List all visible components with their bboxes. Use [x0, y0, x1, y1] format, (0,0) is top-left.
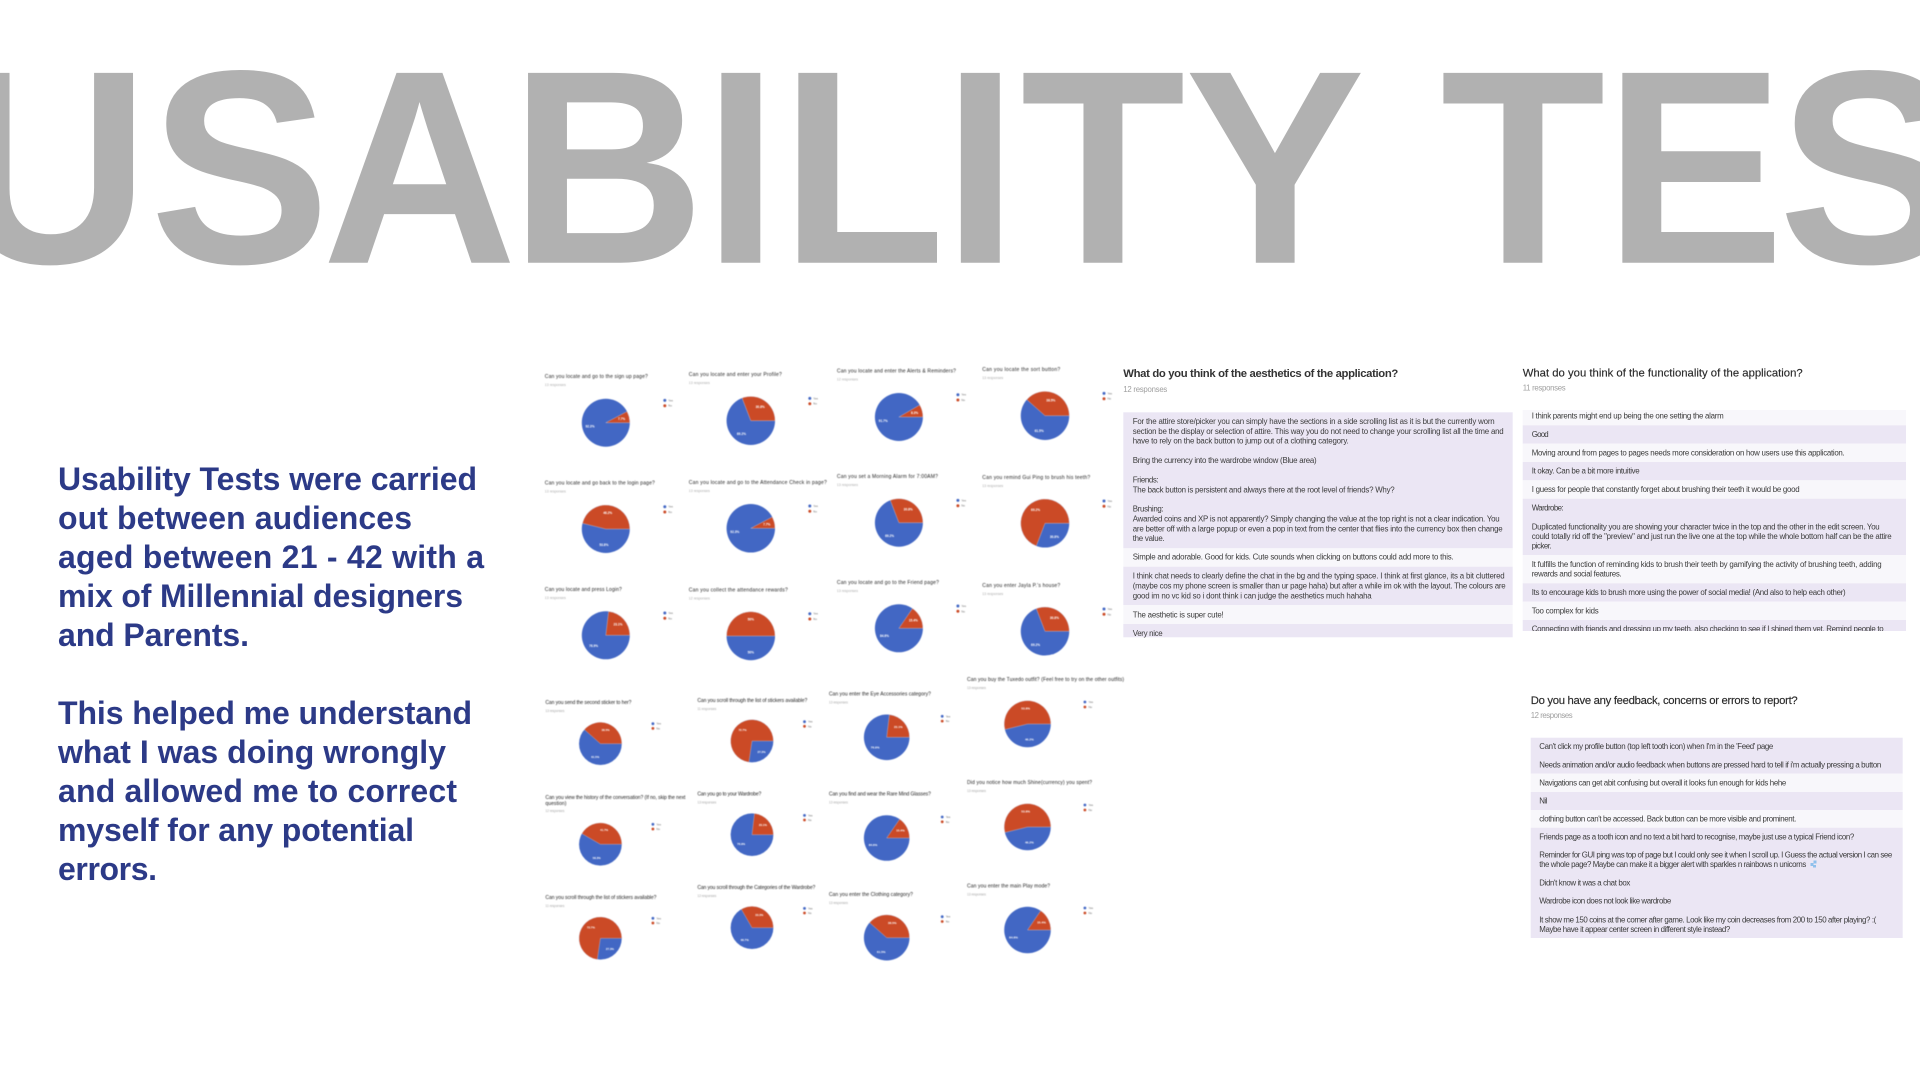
- response text: functionality: Too complex for kids: [1532, 606, 1599, 615]
- pie chart: brush teeth reminder: 13 responses: [982, 484, 1003, 488]
- pie chart: shine currency spent: 53.8%: [1021, 809, 1030, 813]
- pie chart: buy tuxedo outfit: Can you buy the Tuxedo outfit? (Feel free to try on the other outfits): [967, 677, 1124, 683]
- response count: aesthetics: 12 responses: [1123, 385, 1167, 394]
- pie chart: wardrobe: Yes: [808, 813, 813, 817]
- pie chart: main play mode: 15.4%: [1037, 921, 1046, 925]
- pie chart: scroll stickers: [697, 698, 813, 762]
- response text: aesthetics: Simple and adorable. Good for kids. Cute sounds when clicking on buttons could add more to this.: [1133, 553, 1454, 562]
- pie chart: friend page: Yes: [961, 604, 967, 608]
- pie chart: send second sticker: 13 responses: [545, 709, 565, 713]
- pie chart: press login: 23.1%: [613, 622, 623, 626]
- pie chart: attendance check in: 13 responses: [689, 489, 710, 493]
- pie chart: scroll stickers second: Yes: [656, 916, 662, 920]
- pie chart: sort button: 38.5%: [1046, 398, 1056, 402]
- pie chart: send second sticker: No: [656, 726, 660, 730]
- panel: aesthetics responses: [1123, 368, 1513, 638]
- pie chart: shine currency spent: [967, 780, 1094, 850]
- pie chart: rare mind glasses: Yes: [946, 815, 951, 819]
- pie chart: login page: Can you locate and go back to the login page?: [545, 480, 655, 486]
- pie chart: enter house: Yes: [1108, 607, 1113, 611]
- pie chart: shine currency spent: 13 responses: [967, 789, 986, 793]
- pie chart: buy tuxedo outfit: 46.2%: [1025, 738, 1034, 742]
- pie chart: wardrobe: 13 responses: [697, 801, 717, 805]
- pie chart: press login: Yes: [668, 611, 673, 615]
- pie chart: scroll stickers: Can you scroll through the list of stickers available?: [697, 698, 808, 704]
- pie chart: login page: 13 responses: [545, 490, 566, 494]
- pie chart: conversation history: question): [545, 801, 567, 807]
- pie chart: sort button: Can you locate the sort button?: [982, 367, 1060, 373]
- pie chart: main play mode: No: [1088, 911, 1093, 915]
- pie chart: press login: 76.9%: [589, 644, 598, 648]
- pie chart: sort button: No: [1108, 397, 1112, 401]
- response text: functionality: I think parents might end up being the one setting the alarm: [1532, 412, 1724, 421]
- pie chart: press login: Can you locate and press Login?: [545, 587, 622, 593]
- pie chart: send second sticker: 38.5%: [602, 728, 610, 732]
- pie chart: wardrobe categories: Yes: [808, 906, 813, 910]
- pie chart: shine currency spent: 46.2%: [1025, 841, 1034, 845]
- response text: feedback: Maybe have it appear center screen in different style instead?: [1539, 925, 1731, 934]
- pie chart: wardrobe categories: [697, 885, 816, 949]
- pie chart: alerts and reminders: 8.3%: [911, 411, 918, 415]
- pie chart: attendance rewards: Can you collect the attendance rewards?: [689, 588, 788, 594]
- pie chart: enter house: Can you enter Jayla P.'s house?: [982, 583, 1060, 589]
- paragraph: what was learned: [57, 695, 472, 887]
- pie chart: attendance check in: 7.7%: [763, 522, 771, 526]
- pie chart: brush teeth reminder: Yes: [1108, 499, 1113, 503]
- pie chart: sign up page: 13 responses: [545, 383, 566, 387]
- pie chart: friend page: No: [961, 609, 965, 613]
- paragraph: what was learned: what I was doing wrongly: [57, 734, 446, 770]
- pie chart: rare mind glasses: 84.6%: [869, 843, 878, 847]
- pie chart: wardrobe: Can you go to your Wardrobe?: [697, 792, 762, 798]
- response text: feedback: Friends page as a tooth icon and no text a bit hard to recognise, maybe just use a typical Friend icon?: [1539, 832, 1855, 841]
- pie chart: scroll stickers: 11 responses: [697, 707, 717, 711]
- icon: sparkles emoji: [1810, 860, 1816, 868]
- pie chart: enter house: No: [1108, 612, 1112, 616]
- pie chart: wardrobe categories: 66.7%: [741, 938, 749, 942]
- pie chart: scroll stickers: Yes: [808, 720, 813, 724]
- pie chart: brush teeth reminder: [982, 475, 1113, 548]
- pie chart: eye accessories: No: [946, 719, 950, 723]
- pie chart: attendance check in: 92.3%: [730, 530, 740, 534]
- paragraph: test audience: aged between 21 - 42 with a: [58, 539, 484, 575]
- pie chart: press login: 13 responses: [545, 596, 566, 600]
- panel: functionality responses: [1523, 368, 1906, 634]
- pie chart: profile: 13 responses: [689, 381, 710, 385]
- panel: pie chart survey results: [545, 367, 1124, 960]
- pie chart: alerts and reminders: No: [961, 398, 965, 402]
- response text: feedback: Wardrobe icon does not look like wardrobe: [1539, 897, 1672, 906]
- response text: aesthetics: Awarded coins and XP is not apparently? Simply changing the value at the top right is not a clear indication. You: [1133, 514, 1500, 523]
- pie chart: attendance check in: Yes: [813, 504, 818, 508]
- response text: feedback: Reminder for GUI ping was top of page but I could only see it when I scroll up. I Guess the actual version I can see: [1539, 851, 1893, 860]
- pie chart: scroll stickers second: Can you scroll through the list of stickers available?: [545, 895, 657, 901]
- pie chart: eye accessories: Yes: [946, 714, 951, 718]
- pie chart: rare mind glasses: 13 responses: [829, 800, 848, 804]
- pie chart: scroll stickers second: 72.7%: [587, 925, 595, 929]
- pie chart: enter house: 30.8%: [1050, 616, 1059, 620]
- response text: aesthetics: have to rely on the back button to jump out of a clothing category.: [1133, 437, 1349, 446]
- pie chart: scroll stickers: 72.7%: [738, 728, 747, 732]
- response text: feedback: Didn't know it was a chat box: [1539, 878, 1630, 887]
- response text: functionality: Good: [1532, 430, 1549, 439]
- response text: aesthetics: good im no vc kid so i dont think i can judge the aesthetics much hahaha: [1133, 591, 1372, 600]
- pie chart: sign up page: [545, 374, 673, 447]
- response text: functionality: Moving around from pages to pages needs more consideration on how users use this application.: [1532, 448, 1845, 457]
- response text: aesthetics: [1133, 417, 1506, 638]
- pie chart: enter house: 13 responses: [982, 592, 1003, 596]
- pie chart: friend page: [837, 580, 967, 652]
- response text: feedback: Needs animation and/or audio feedback when buttons are pressed hard to tell if i'm actually pressing a button: [1539, 760, 1881, 769]
- pie chart: attendance rewards: [689, 588, 818, 660]
- pie chart: buy tuxedo outfit: Yes: [1088, 700, 1094, 704]
- pie chart: sort button: 61.5%: [1035, 429, 1044, 433]
- pie chart: brush teeth reminder: 30.8%: [1050, 535, 1059, 539]
- pie chart: clothing category: 13 responses: [829, 901, 848, 905]
- pie chart: rare mind glasses: 15.4%: [896, 829, 905, 833]
- pie chart: brush teeth reminder: 69.2%: [1031, 508, 1040, 512]
- pie chart: attendance rewards: Yes: [813, 612, 818, 616]
- paragraph: test audience: and Parents.: [58, 617, 249, 653]
- pie chart: wardrobe: [697, 792, 813, 856]
- pie chart: clothing category: Can you enter the Clothing category?: [829, 892, 913, 898]
- pie chart: profile: No: [813, 402, 817, 406]
- heading: aesthetics question: What do you think of the aesthetics of the application?: [1123, 368, 1398, 380]
- response text: aesthetics: The back button is persistent and always there at the root level of friends? Why?: [1133, 485, 1395, 494]
- response text: aesthetics: I think chat needs to clearly define the chat in the bg and the typing space. I think at first glance, its a bit cluttered: [1133, 572, 1505, 581]
- pie chart: attendance check in: No: [813, 509, 817, 513]
- pie chart: attendance check in: [689, 480, 827, 553]
- pie chart: eye accessories: 76.9%: [871, 746, 880, 750]
- pie chart: morning alarm: No: [961, 504, 965, 508]
- pie chart: shine currency spent: Yes: [1088, 803, 1094, 807]
- pie chart: morning alarm: 69.2%: [885, 534, 894, 538]
- pie chart: sort button: 13 responses: [982, 376, 1003, 380]
- response text: aesthetics: The aesthetic is super cute!: [1133, 610, 1224, 619]
- paragraph: what was learned: and allowed me to correct: [58, 773, 457, 809]
- panel: feedback responses: [1531, 695, 1903, 938]
- pie chart: send second sticker: Can you send the second sticker to her?: [545, 700, 632, 706]
- pie chart: scroll stickers second: No: [656, 921, 660, 925]
- response text: functionality: Wardrobe:: [1532, 504, 1564, 513]
- paragraph: test audience: Usability Tests were carried: [58, 461, 477, 497]
- pie chart: conversation history: Yes: [656, 822, 662, 826]
- response text: aesthetics: For the attire store/picker you can simply have the sections in a side scrolling list as it is but the currently worn: [1133, 417, 1495, 426]
- pie chart: wardrobe: No: [808, 818, 812, 822]
- pie chart: main play mode: Yes: [1088, 906, 1094, 910]
- paragraph: what was learned: errors.: [58, 851, 157, 887]
- pie chart: buy tuxedo outfit: 53.8%: [1021, 706, 1030, 710]
- pie chart: main play mode: 13 responses: [967, 892, 986, 896]
- response text: functionality: picker.: [1532, 542, 1552, 551]
- pie chart: wardrobe categories: No: [808, 911, 812, 915]
- pie chart: scroll stickers: 27.3%: [758, 750, 766, 754]
- response text: functionality: Duplicated functionality you are showing your character twice in the top and the other in the edit screen. You: [1532, 522, 1880, 531]
- response text: aesthetics: Very nice: [1133, 629, 1163, 638]
- pie chart: enter house: [982, 583, 1113, 656]
- pie chart: eye accessories: 23.1%: [894, 725, 903, 729]
- pie chart: clothing category: Yes: [946, 915, 951, 919]
- pie chart: press login: [545, 587, 673, 659]
- response text: functionality: [1532, 412, 1892, 634]
- pie chart: sign up page: Can you locate and go to the sign up page?: [545, 374, 648, 380]
- pie chart: attendance rewards: No: [813, 617, 817, 621]
- heading: functionality question: What do you think of the functionality of the application?: [1523, 368, 1803, 380]
- response text: aesthetics: Friends:: [1133, 476, 1159, 485]
- pie chart: main play mode: Can you enter the main Play mode?: [967, 884, 1050, 890]
- pie chart: rare mind glasses: No: [946, 820, 950, 824]
- pie chart: attendance check in: Can you locate and go to the Attendance Check in page?: [689, 480, 827, 486]
- pie chart: conversation history: 41.7%: [600, 828, 609, 832]
- pie chart: sign up page: Yes: [668, 398, 673, 402]
- response text: functionality: It okay. Can be a bit more intuitive: [1532, 467, 1640, 476]
- paragraph: test audience: out between audiences: [58, 500, 412, 536]
- pie chart: clothing category: [829, 892, 951, 960]
- paragraph: test audience: [58, 461, 484, 653]
- pie chart: friend page: Can you locate and go to the Friend page?: [837, 580, 939, 586]
- response text: functionality: Connecting with friends and dressing up my teeth, also checking to see if I shined them yet. Remind people to: [1532, 625, 1884, 634]
- text block: usability test description: [57, 461, 484, 887]
- response text: feedback: Nil: [1539, 797, 1548, 806]
- pie chart: conversation history: Can you view the history of the conversation? (If no, skip the next: [545, 795, 686, 801]
- pie chart: friend page: 84.6%: [880, 634, 889, 638]
- pie chart: morning alarm: Yes: [961, 498, 967, 502]
- pie chart: login page: 53.8%: [599, 543, 609, 547]
- pie chart: wardrobe: 76.9%: [737, 842, 746, 846]
- pie chart: sort button: Yes: [1108, 391, 1113, 395]
- pie chart: scroll stickers second: 11 responses: [545, 904, 565, 908]
- pie chart: profile: Can you locate and enter your Profile?: [689, 372, 782, 378]
- pie chart: attendance rewards: 12 responses: [689, 596, 710, 600]
- pie chart: conversation history: 12 responses: [545, 809, 565, 813]
- pie chart: wardrobe categories: 33.3%: [755, 913, 764, 917]
- pie chart: scroll stickers: No: [808, 724, 812, 728]
- pie chart: buy tuxedo outfit: No: [1088, 705, 1093, 709]
- pie chart: send second sticker: 61.5%: [591, 755, 600, 759]
- response text: feedback: [1539, 742, 1893, 934]
- pie chart: eye accessories: [829, 692, 951, 760]
- pie chart: conversation history: 58.3%: [593, 856, 601, 860]
- response text: functionality: Its to encourage kids to brush more using the power of social media! (And also to help each other): [1532, 588, 1846, 597]
- pie chart: buy tuxedo outfit: 13 responses: [967, 686, 986, 690]
- response count: feedback: 12 responses: [1531, 711, 1573, 720]
- pie chart: morning alarm: Can you set a Morning Alarm for 7:00AM?: [837, 474, 938, 480]
- pie chart: friend page: 13 responses: [837, 589, 858, 593]
- pie chart: sort button: [982, 367, 1113, 440]
- pie chart: clothing category: 38.5%: [888, 921, 897, 925]
- pie chart: morning alarm: 13 responses: [837, 483, 858, 487]
- response text: aesthetics: are better off with a large popup or even a pop in text from the center that flies into the currency box then change: [1133, 524, 1503, 533]
- pie chart: wardrobe categories: Can you scroll through the Categories of the Wardrobe?: [697, 885, 816, 891]
- pie chart: login page: No: [668, 510, 672, 514]
- pie chart: press login: No: [668, 616, 672, 620]
- pie chart: alerts and reminders: 91.7%: [879, 419, 888, 423]
- response text: feedback: Can't click my profile button (top left tooth icon) when I'm in the 'Feed' page: [1539, 742, 1774, 751]
- pie chart: attendance rewards: 50%: [748, 618, 754, 622]
- pie chart: rare mind glasses: [829, 792, 951, 861]
- pie chart: conversation history: [545, 795, 686, 866]
- pie chart: wardrobe categories: 12 responses: [697, 894, 717, 898]
- response text: functionality: It fulfills the function of reminding kids to brush their teeth by gamifying the activity of brushing teeth, adding: [1532, 560, 1882, 569]
- pie chart: sign up page: 92.3%: [585, 425, 595, 429]
- response text: feedback: the whole page? Maybe can make it a bigger alert with sparkles n rainbows n unicorns: [1539, 860, 1806, 869]
- pie chart: enter house: 69.2%: [1031, 643, 1040, 647]
- pie chart: eye accessories: Can you enter the Eye Accessories category?: [829, 691, 931, 697]
- response text: functionality: I guess for people that constantly forget about brushing their teeth it would be good: [1532, 485, 1800, 494]
- pie chart: main play mode: 84.6%: [1009, 935, 1018, 939]
- response text: feedback: Navigations can get abit confusing but overall it looks fun enough for kids hehe: [1539, 779, 1787, 788]
- pie chart: profile: Yes: [813, 396, 818, 400]
- pie chart: rare mind glasses: Can you find and wear the Rare Mind Glasses?: [829, 792, 931, 798]
- pie chart: clothing category: 61.5%: [877, 950, 886, 954]
- paragraph: what was learned: myself for any potential: [58, 812, 414, 848]
- pie chart: sign up page: 7.7%: [618, 417, 625, 421]
- pie chart: friend page: 15.4%: [909, 619, 918, 623]
- pie chart: main play mode: [967, 884, 1094, 953]
- pie chart: send second sticker: Yes: [656, 722, 662, 726]
- pie chart: alerts and reminders: [837, 368, 967, 441]
- response text: feedback: clothing button can't be accessed. Back button can be more visible and prominent.: [1539, 814, 1796, 823]
- pie chart: profile: 69.2%: [737, 432, 746, 436]
- pie chart: shine currency spent: No: [1088, 808, 1093, 812]
- pie chart: buy tuxedo outfit: [967, 677, 1124, 747]
- pie chart: shine currency spent: Did you notice how much Shine(currency) you spent?: [967, 780, 1092, 786]
- response text: functionality: could totally rid off the "preview" and just run the live one at the top while the whole bottom half can be the attire: [1532, 532, 1892, 541]
- pie chart: brush teeth reminder: Can you remind Gui Ping to brush his teeth?: [982, 475, 1090, 481]
- pie chart: login page: [545, 480, 673, 553]
- pie chart: send second sticker: [545, 700, 662, 765]
- pie chart: wardrobe: 23.1%: [759, 823, 767, 827]
- pie chart: login page: Yes: [668, 505, 673, 509]
- pie chart: alerts and reminders: 12 responses: [837, 378, 858, 382]
- pie chart: scroll stickers second: [545, 895, 662, 960]
- response text: aesthetics: Bring the currency into the wardrobe window (Blue area): [1133, 456, 1317, 465]
- pie chart: conversation history: No: [656, 827, 660, 831]
- pie chart: alerts and reminders: Yes: [961, 393, 967, 397]
- response text: functionality: rewards and social features.: [1532, 570, 1622, 579]
- response text: aesthetics: Brushing:: [1133, 505, 1164, 514]
- pie chart: brush teeth reminder: No: [1108, 504, 1112, 508]
- response text: aesthetics: the value.: [1133, 534, 1165, 543]
- paragraph: test audience: mix of Millennial designers: [58, 578, 463, 614]
- heading: feedback question: Do you have any feedback, concerns or errors to report?: [1531, 695, 1798, 707]
- pie chart: alerts and reminders: Can you locate and enter the Alerts & Reminders?: [837, 368, 956, 374]
- pie chart: clothing category: No: [946, 920, 950, 924]
- pie chart: profile: [689, 372, 818, 445]
- response text: aesthetics: (maybe cos my phone screen is smaller than ur page haha) but after a while im ok with the layout. The colours are: [1133, 581, 1506, 590]
- response text: aesthetics: section be the display or selection of attire. This way you do not need to change your scrolling list all the time and: [1133, 427, 1504, 436]
- pie chart: profile: 30.8%: [756, 405, 765, 409]
- pie chart: login page: 46.2%: [603, 511, 612, 515]
- paragraph: what was learned: This helped me understand: [58, 695, 472, 731]
- pie chart: attendance rewards: 50%: [748, 650, 754, 654]
- response text: feedback: It show me 150 coins at the corner after game. Look like my coin decreases from 200 to 150 after playing? :(: [1539, 915, 1877, 924]
- pie chart: sign up page: No: [668, 404, 672, 408]
- response count: functionality: 11 responses: [1523, 384, 1566, 393]
- pie chart: eye accessories: 13 responses: [829, 700, 848, 704]
- pie chart: scroll stickers second: 27.3%: [606, 947, 614, 951]
- pie chart: morning alarm: 30.8%: [904, 507, 913, 511]
- pie chart: morning alarm: [837, 474, 967, 547]
